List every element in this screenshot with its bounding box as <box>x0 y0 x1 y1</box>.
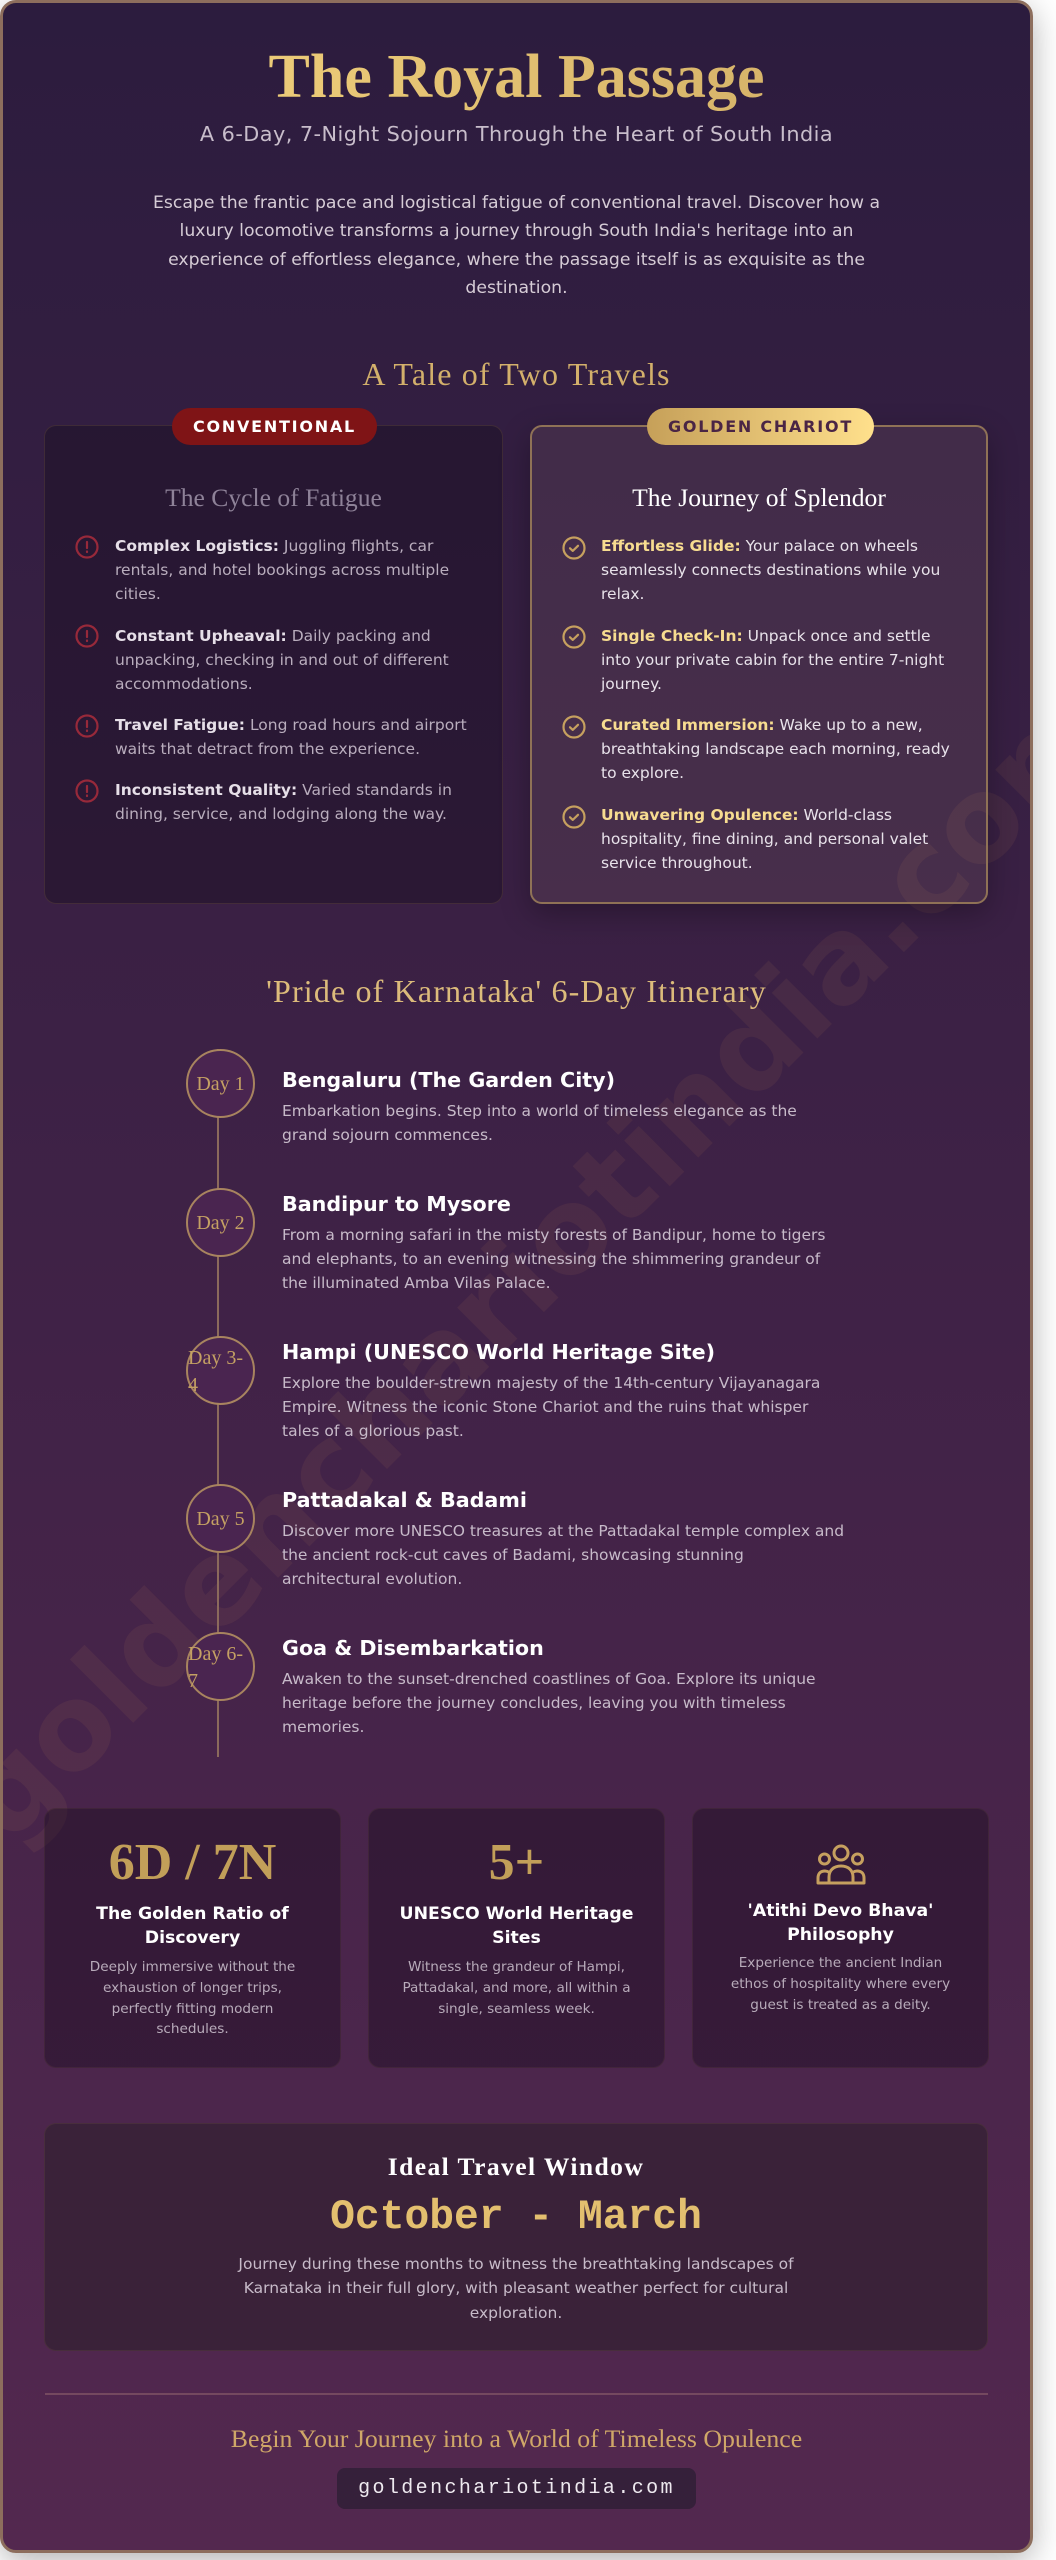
list item: curated immersion: breathtaking landscape each morning, ready <box>601 740 950 758</box>
panel description: exploration. <box>470 2304 562 2322</box>
travel months: October - March <box>330 2195 702 2241</box>
icon: people <box>816 1844 866 1884</box>
day 3-4 description: Explore the boulder-strewn majesty of the 14th-century Vijayanagara <box>282 1374 820 1392</box>
heading: journey of splendor: The Journey of Splendor <box>632 483 886 512</box>
day 3-4 badge: 4 <box>188 1374 198 1396</box>
website link: goldenchariotindia.com <box>358 2477 675 2500</box>
day 2 description: From a morning safari in the misty forests of Bandipur, home to tigers <box>282 1226 825 1244</box>
stat description: Pattadakal, and more, all within a <box>402 1980 631 1996</box>
stat card: 5+ <box>368 1808 665 2068</box>
day 6-7 badge <box>186 1632 255 1701</box>
list item: constant upheaval: unpacking, checking in and out of different <box>115 651 449 669</box>
intro text: destination. <box>465 278 568 298</box>
day 5 description: Discover more UNESCO treasures at the Pattadakal temple complex and <box>282 1522 844 1540</box>
heading: a tale of two travels: A Tale of Two Travels <box>362 356 671 392</box>
day 3-4 badge: Day 3- <box>188 1346 243 1368</box>
list item: constant upheaval: Constant Upheaval: Daily packing and <box>115 627 431 645</box>
list item: single check-in: into your private cabin for the entire 7-night <box>601 651 944 669</box>
list item: unwavering opulence <box>601 806 928 872</box>
stat title: 'Atithi Devo Bhava' <box>748 1901 933 1921</box>
day 1 badge: Day 1 <box>196 1073 245 1095</box>
icon: check <box>562 805 586 829</box>
stat description <box>402 1959 631 2017</box>
stat description: Witness the grandeur of Hampi, <box>408 1959 625 1975</box>
day 6-7 badge: 7 <box>188 1670 198 1692</box>
stat description: Deeply immersive without the <box>90 1959 295 1975</box>
list item: unwavering opulence: hospitality, fine dining, and personal valet <box>601 830 928 848</box>
stat description: schedules. <box>156 2021 229 2037</box>
day 3-4 badge <box>186 1336 255 1405</box>
stat description: ethos of hospitality where every <box>731 1976 950 1992</box>
list item: travel fatigue: Travel Fatigue: Long road hours and airport <box>115 716 467 734</box>
list item: effortless glide: Effortless Glide: Your palace on wheels <box>601 537 918 555</box>
panel description <box>238 2255 794 2322</box>
list item: inconsistent quality: Inconsistent Quality: Varied standards in <box>115 781 452 799</box>
panel description: Journey during these months to witness the breathtaking landscapes of <box>238 2255 794 2273</box>
icon: alert <box>75 535 99 559</box>
day 2 description: and elephants, to an evening witnessing the shimmering grandeur of <box>282 1250 820 1268</box>
stat description: exhaustion of longer trips, <box>103 1980 282 1996</box>
list item: inconsistent quality: dining, service, and lodging along the way. <box>115 805 447 823</box>
badge: golden chariot: GOLDEN CHARIOT <box>668 417 853 436</box>
stat number: 5+ <box>489 1834 544 1891</box>
panel description: Karnataka in their full glory, with pleasant weather perfect for cultural <box>244 2279 788 2297</box>
stat title: Philosophy <box>787 1925 894 1945</box>
icon: alert <box>75 779 99 803</box>
icon: check <box>562 536 586 560</box>
day 5 description: the ancient rock-cut caves of Badami, showcasing stunning <box>282 1546 744 1564</box>
list item: single check-in: journey. <box>601 675 662 693</box>
day 1 description: grand sojourn commences. <box>282 1126 493 1144</box>
day 2 description: the illuminated Amba Vilas Palace. <box>282 1274 550 1292</box>
list item: complex logistics: Complex Logistics: Juggling flights, car <box>115 537 433 555</box>
stat title <box>96 1904 289 1948</box>
intro text: luxury locomotive transforms a journey through South India's heritage into an <box>180 221 853 241</box>
day 1 description <box>282 1102 797 1144</box>
footer tagline: Begin Your Journey into a World of Timeless Opulence <box>231 2424 802 2453</box>
stat title: Discovery <box>145 1928 240 1948</box>
list item: curated immersion: to explore. <box>601 764 684 782</box>
list item: effortless glide <box>601 537 940 603</box>
stat description: single, seamless week. <box>438 2001 595 2017</box>
list item: unwavering opulence: service throughout. <box>601 854 753 872</box>
list item: inconsistent quality <box>115 781 452 823</box>
day 5 description: architectural evolution. <box>282 1570 462 1588</box>
day 3-4 description <box>282 1374 820 1440</box>
day 5 title: Pattadakal & Badami <box>282 1488 527 1512</box>
day 2 badge <box>186 1188 255 1257</box>
stat description <box>731 1955 950 2013</box>
list item: single check-in <box>600 627 944 693</box>
panel: golden chariot <box>530 425 988 904</box>
badge: conventional: CONVENTIONAL <box>193 417 356 436</box>
subtitle: A 6-Day, 7-Night Sojourn Through the Heart of South India <box>200 122 833 146</box>
day 6-7 description: memories. <box>282 1718 364 1736</box>
list item: curated immersion: Curated Immersion: Wake up to a new, <box>601 716 923 734</box>
panel heading: Ideal Travel Window <box>388 2152 644 2181</box>
icon: alert <box>75 714 99 738</box>
panel: ideal travel window <box>44 2123 988 2351</box>
stat title <box>748 1901 933 1945</box>
day 6-7 description <box>282 1670 816 1736</box>
intro text <box>153 193 880 298</box>
footer divider <box>45 2393 988 2395</box>
day 6-7 badge: Day 6- <box>188 1642 243 1664</box>
stat title: UNESCO World Heritage <box>400 1904 633 1924</box>
list item: effortless glide: relax. <box>601 585 644 603</box>
day 1 badge <box>186 1049 255 1118</box>
day 6-7 title: Goa & Disembarkation <box>282 1636 544 1660</box>
day 3-4 description: Empire. Witness the iconic Stone Chariot and the ruins that whisper <box>282 1398 808 1416</box>
day 5 description <box>282 1522 844 1588</box>
badge: conventional <box>172 408 377 445</box>
stat title <box>400 1904 633 1948</box>
list item: effortless glide: seamlessly connects destinations while you <box>601 561 940 579</box>
intro text: experience of effortless elegance, where the passage itself is as exquisite as the <box>168 250 865 270</box>
day 5 badge <box>186 1484 255 1553</box>
day 6-7 description: heritage before the journey concludes, leaving you with timeless <box>282 1694 786 1712</box>
stat description <box>90 1959 295 2037</box>
day 2 title: Bandipur to Mysore <box>282 1192 511 1216</box>
list item: complex logistics: cities. <box>115 585 161 603</box>
panel: conventional <box>44 425 503 904</box>
list item: complex logistics <box>115 537 449 603</box>
list item: unwavering opulence: Unwavering Opulence: World-class <box>601 806 892 824</box>
day 6-7 description: Awaken to the sunset-drenched coastlines of Goa. Explore its unique <box>282 1670 816 1688</box>
badge: golden chariot <box>647 408 874 445</box>
timeline itinerary <box>217 1049 219 1757</box>
stat card: atithi devo bhava <box>692 1808 989 2068</box>
list item: travel fatigue: waits that detract from the experience. <box>115 740 420 758</box>
icon: check <box>562 625 586 649</box>
day 3-4 title: Hampi (UNESCO World Heritage Site) <box>282 1340 715 1364</box>
stat description: Experience the ancient Indian <box>739 1955 942 1971</box>
day 1 description: Embarkation begins. Step into a world of timeless elegance as the <box>282 1102 797 1120</box>
stat title: The Golden Ratio of <box>96 1904 289 1924</box>
stat title: Sites <box>492 1928 541 1948</box>
day 1 title: Bengaluru (The Garden City) <box>282 1068 615 1092</box>
icon: alert <box>75 624 99 648</box>
list item: constant upheaval: accommodations. <box>115 675 253 693</box>
title: The Royal Passage <box>268 43 764 111</box>
website link <box>337 2468 696 2509</box>
list item: complex logistics: rentals, and hotel bookings across multiple <box>115 561 449 579</box>
intro text: Escape the frantic pace and logistical fatigue of conventional travel. Discover how a <box>153 193 880 213</box>
list item: constant upheaval <box>115 627 449 693</box>
stat description: perfectly fitting modern <box>112 2001 273 2017</box>
day 3-4 description: tales of a glorious past. <box>282 1422 464 1440</box>
list item: single check-in: Single Check-In: Unpack once and settle <box>601 627 931 645</box>
day 2 badge: Day 2 <box>196 1212 245 1234</box>
heading: cycle of fatigue: The Cycle of Fatigue <box>165 483 382 512</box>
stat description: guest is treated as a deity. <box>750 1997 931 2013</box>
list item: curated immersion <box>601 716 950 782</box>
heading: itinerary: 'Pride of Karnataka' 6-Day Itinerary <box>266 973 767 1009</box>
icon: check <box>562 715 586 739</box>
stat card: 6D / 7N <box>44 1808 341 2068</box>
list item: travel fatigue <box>115 716 467 758</box>
stat number: 6D / 7N <box>109 1834 276 1891</box>
day 2 description <box>282 1226 825 1292</box>
day 5 badge: Day 5 <box>196 1508 245 1530</box>
